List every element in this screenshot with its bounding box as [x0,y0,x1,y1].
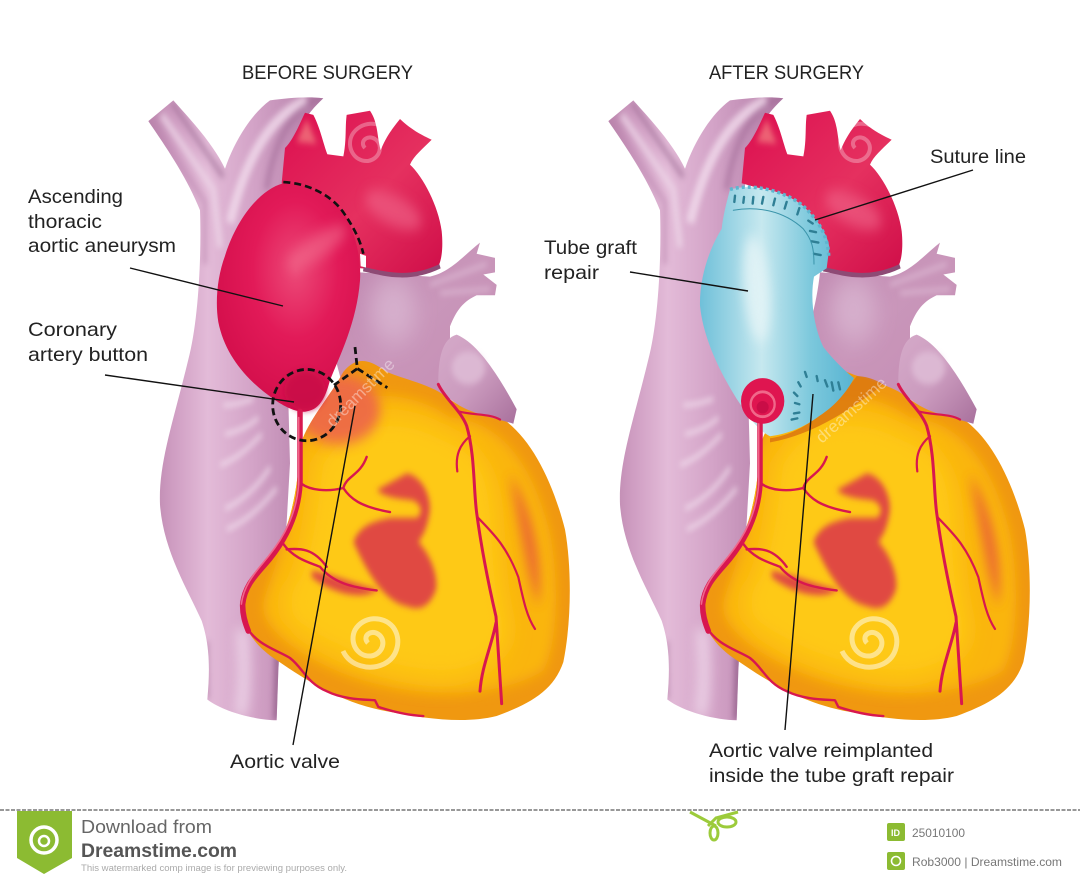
heading: after surgery: AFTER SURGERY [709,62,864,84]
aortic arch [742,111,902,277]
callout: tube graft repair: Tube graft [544,237,638,259]
tube graft [700,187,854,436]
dashed lines: valve [334,347,387,388]
coronary artery button [284,371,326,410]
callout: suture line [815,146,1026,220]
footer: download text: Dreamstime.com [81,841,237,862]
callout: tube graft repair: repair [544,262,600,284]
footer: green ribbon logo [17,811,72,874]
watermark text left: dreamstime [322,355,399,431]
callout: aortic valve reimplanted [709,394,955,787]
coronary arteries [701,384,995,716]
dashed circle: coronary button [273,369,341,441]
callout: aortic valve reimplanted: Aortic valve reimplanted [709,740,933,762]
footer: author credit: Rob3000 | Dreamstime.com [912,855,1062,869]
watermark text right: dreamstime [812,373,891,447]
darker orange shadow under graft [770,376,883,442]
callout: aortic valve: Aortic valve [230,751,340,773]
aneurysm highlight [283,218,350,277]
watermark: spirals [343,124,897,667]
aneurysm [217,183,360,412]
callout: ascending thoracic aortic aneurysm: Ascending [28,186,123,208]
callout: ascending thoracic aortic aneurysm: aortic aneurysm [28,235,176,257]
reimplanted coronary button [741,378,784,424]
callout: ascending thoracic aortic aneurysm [28,186,283,306]
callout: suture line: Suture line [930,146,1026,168]
footer: download text: Download from [81,817,212,837]
icon: scissors [690,812,738,840]
heading: before surgery: BEFORE SURGERY [242,62,413,84]
reimplanted valve sutures [792,372,840,420]
panel: heart before surgery [148,96,570,720]
footer: image id [887,823,965,841]
panel: heart after surgery [608,96,1030,720]
callout: coronary artery button [28,319,294,402]
aortic arch [282,111,442,277]
footer divider [0,809,1080,811]
footer: author credit [887,852,1062,870]
dashed cut line: aorta [283,182,363,254]
callout: tube graft repair [544,237,748,291]
callout: coronary artery button: artery button [28,344,148,366]
callout: coronary artery button: Coronary [28,319,117,341]
callout: ascending thoracic aortic aneurysm: thoracic [28,211,102,233]
callout: aortic valve reimplanted: inside the tube graft repair [709,765,955,787]
suture line [730,187,829,264]
footer: image id: 25010100 [912,826,965,840]
coronary arteries [241,384,535,716]
footer: download text: This watermarked comp image is for previewing purposes only. [81,863,347,873]
white notch under dashed arc [360,254,366,267]
footer: image id: ID [891,828,901,838]
footer: download text [81,817,347,873]
orange valve root area [297,374,380,444]
callout: aortic valve [230,406,355,773]
